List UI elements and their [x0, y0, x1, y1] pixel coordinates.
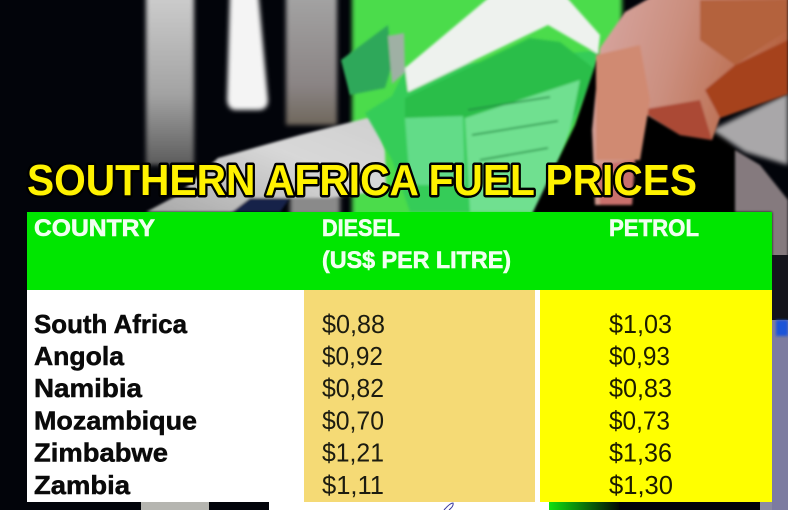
right bottom grey	[760, 502, 772, 510]
header: unit: (US$ PER LITRE)	[322, 247, 511, 274]
country column background	[27, 290, 304, 502]
country names: Angola	[34, 341, 125, 371]
petrol prices: $0,93	[609, 341, 670, 371]
dark shadow under hand	[532, 60, 738, 214]
country names: Namibia	[34, 373, 143, 403]
diesel prices: $1,11	[322, 470, 384, 500]
title: SOUTHERN AFRICA FUEL PRICES	[27, 156, 697, 205]
table header band	[27, 212, 772, 290]
right edge dark top	[772, 255, 788, 320]
header: country: COUNTRY	[34, 215, 155, 242]
diesel prices: $0,92	[322, 341, 383, 371]
hand	[592, 0, 788, 205]
pump background bands	[146, 0, 622, 220]
petrol prices: $0,83	[609, 373, 672, 403]
grey backdrop at right	[712, 93, 788, 165]
petrol prices: $1,36	[609, 438, 672, 468]
diesel prices: $1,21	[322, 438, 384, 468]
bottom photo strip light patch	[141, 502, 209, 510]
diesel prices: $0,82	[322, 373, 384, 403]
bottom white gap with signature	[269, 502, 549, 510]
diesel column background	[304, 290, 535, 502]
nozzle spout	[146, 116, 386, 212]
header: diesel: DIESEL	[322, 215, 400, 242]
diesel prices	[322, 309, 385, 500]
right edge blue-grey strip	[772, 302, 788, 510]
metal filler ring	[733, 149, 788, 255]
diesel prices: $0,70	[322, 406, 384, 436]
country names	[34, 309, 197, 500]
country names: South Africa	[34, 309, 188, 339]
petrol prices: $0,73	[609, 406, 670, 436]
nozzle handle	[341, 0, 600, 212]
header: petrol: PETROL	[609, 215, 699, 242]
column separator	[535, 290, 540, 502]
country names: Mozambique	[34, 406, 197, 436]
petrol prices	[609, 309, 673, 500]
country names: Zimbabwe	[34, 438, 168, 468]
petrol prices: $1,30	[609, 470, 673, 500]
petrol column background	[540, 290, 772, 502]
bottom photo strip right	[549, 502, 619, 510]
diesel prices: $0,88	[322, 309, 385, 339]
country names: Zambia	[34, 470, 131, 500]
petrol prices: $1,03	[609, 309, 672, 339]
right edge blue accent	[776, 320, 788, 336]
fuel price table	[27, 212, 772, 502]
